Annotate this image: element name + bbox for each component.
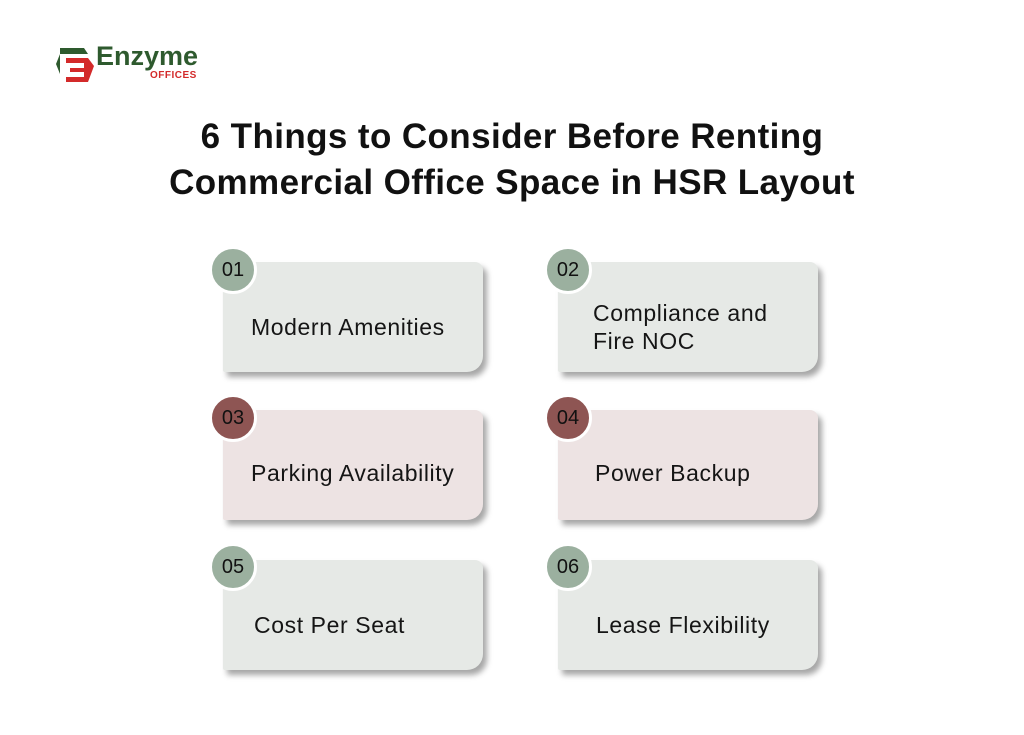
card 02: Compliance and <box>593 300 768 326</box>
card 06: Lease Flexibility <box>596 612 770 638</box>
badge 02 <box>544 246 592 294</box>
card 01 <box>223 262 483 372</box>
badge 06: 06 <box>557 556 579 578</box>
logo <box>56 41 198 82</box>
badge 05: 05 <box>222 556 244 578</box>
badge 04: 04 <box>557 406 579 428</box>
logo: OFFICES <box>150 70 197 81</box>
badge 02: 02 <box>557 258 579 280</box>
card 06 <box>558 560 818 670</box>
card 01: Modern Amenities <box>251 314 445 340</box>
logo: Enzyme <box>96 41 198 71</box>
badge 05 <box>209 543 257 591</box>
title: 6 Things to Consider Before Renting <box>201 117 823 156</box>
card 03 <box>223 410 483 520</box>
card 04: Power Backup <box>595 460 750 486</box>
badge 04 <box>544 394 592 442</box>
badge 06 <box>544 543 592 591</box>
badge 01 <box>209 246 257 294</box>
card 05: Cost Per Seat <box>254 612 405 638</box>
title: Commercial Office Space in HSR Layout <box>169 163 855 202</box>
card 02: Fire NOC <box>593 328 695 354</box>
badge 03 <box>209 394 257 442</box>
title <box>169 117 855 202</box>
card 02 <box>558 262 818 372</box>
card 04 <box>558 410 818 520</box>
card 05 <box>223 560 483 670</box>
card 03: Parking Availability <box>251 460 454 486</box>
badge 01: 01 <box>222 258 244 280</box>
badge 03: 03 <box>222 406 244 428</box>
